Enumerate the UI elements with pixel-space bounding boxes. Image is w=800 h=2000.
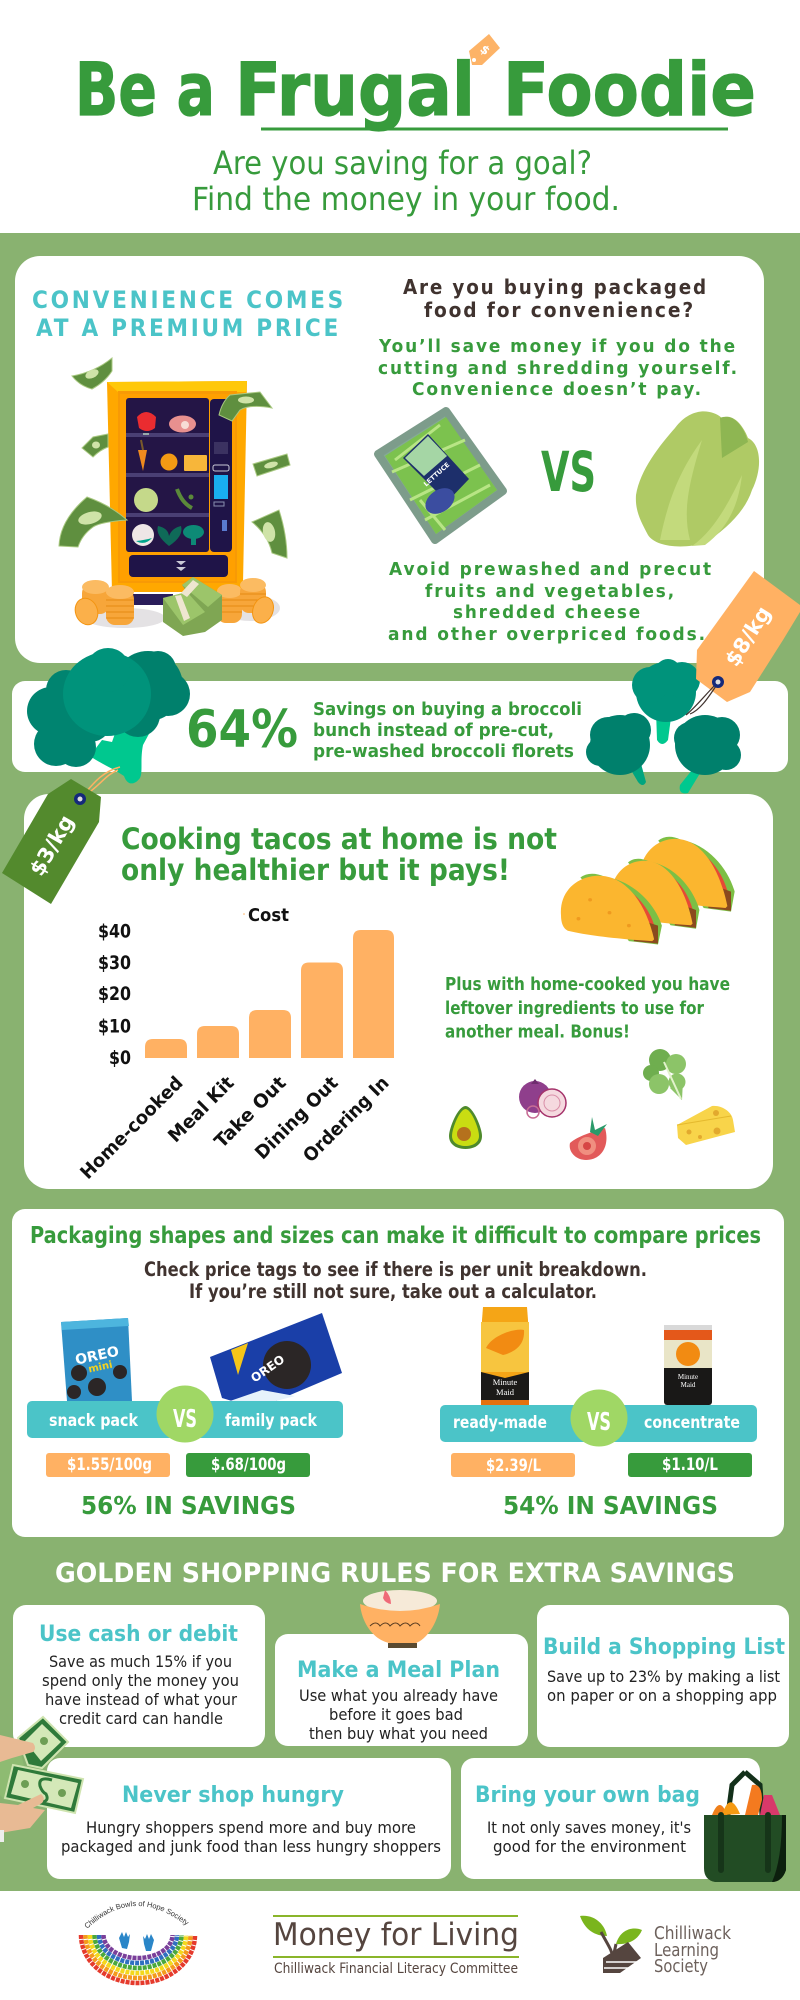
taco front [561,874,662,945]
bar chart: Cost [248,905,289,926]
text: check price tags: Check price tags to see if there is per unit breakdown. [144,1258,647,1281]
icon: price tag [469,34,500,65]
text: avoid prewashed: shredded cheese [453,602,642,623]
card: make a meal plan [275,1634,528,1746]
bar chart: $0 [109,1047,131,1069]
icon: tacos [561,837,735,945]
logo: Chilliwack Learning Society: Learning [654,1940,719,1961]
price tag: $1.10/L [628,1453,752,1477]
icon: packaged lettuce: LETTUCE [422,461,451,488]
heading: golden shopping rules: GOLDEN SHOPPING RULES FOR EXTRA SAVINGS [55,1558,735,1589]
card: make a meal plan: then buy what you need [309,1724,488,1743]
bar chart: $10 [98,1016,131,1038]
text: 54% in savings: 54% IN SAVINGS [503,1491,718,1520]
icon: bowl [360,1590,440,1648]
logo: Chilliwack Learning Society: Society [654,1956,708,1977]
logo: Chilliwack Learning Society: Chilliwack [654,1923,731,1944]
icon: avocado [449,1106,482,1149]
card: use cash or debit: credit card can handle [59,1709,223,1728]
price tag: $.68/100g [186,1453,310,1477]
icon: red onion [519,1079,566,1118]
heading: are you buying packaged food: food for convenience? [424,298,695,322]
text: leftovers bonus [445,975,730,1042]
text: check price tags: If you’re still not sure, take out a calculator. [189,1280,597,1303]
card: use cash or debit [13,1605,265,1747]
price tag: $2.39/L [451,1453,575,1477]
heading: cooking tacos: Cooking tacos at home is not [121,822,557,856]
icon: large broccoli [27,648,190,783]
card: make a meal plan: before it goes bad [329,1705,463,1724]
text: save money: cutting and shredding yourself. [378,358,739,379]
panel: tacos [24,794,773,1189]
icon: minute maid carton: Maid [496,1387,515,1397]
card: build a shopping list: on paper or on a shopping app [547,1686,777,1705]
panel: packaging [12,1209,784,1537]
text: savings on broccoli: pre-washed broccoli florets [313,742,574,762]
subtitle: Are you saving for a goal? [213,144,592,182]
card: make a meal plan: Use what you already have [299,1686,498,1705]
logo: Money for Living [273,1915,519,1977]
text: VS: VS [541,440,596,504]
icon: $8/kg tag [686,571,800,715]
icon: minute maid concentrate [664,1325,712,1405]
bar chart: Take Out [211,1073,291,1153]
card: bring your own bag: Bring your own bag [475,1783,700,1808]
comparison band: snack vs family [27,1386,343,1442]
icon: whole lettuce [636,411,759,546]
icon: three broccoli florets [586,659,741,793]
comparison band: snack vs family: VS [173,1404,197,1433]
text: 64%: 64% [186,700,298,760]
vending items [132,412,207,546]
bar chart: Home-cooked [77,1073,188,1184]
bar chart: $30 [98,952,131,974]
icon: minute maid carton: Minute [493,1377,517,1387]
card: bring your own bag [461,1758,760,1879]
icon: oreo family pack: OREO [248,1352,287,1385]
logo: Chilliwack Bowls of Hope Society: Chilliwack Bowls of Hope Society [84,1900,189,1928]
text: avoid prewashed: fruits and vegetables, [425,581,676,602]
text: avoid prewashed: Avoid prewashed and precut [389,559,713,580]
coins left [72,580,134,628]
heading: convenience comes at a premium price: AT A PREMIUM PRICE [36,314,341,342]
heading: are you buying packaged food: Are you buying packaged [403,275,708,299]
card: make a meal plan: Make a Meal Plan [297,1658,500,1683]
icon: oreo mini box [61,1318,132,1401]
price tag: $1.55/100g: $1.55/100g [67,1455,152,1474]
taco rear [640,837,735,912]
title: Be a [75,48,215,133]
price tag: $2.39/L: $2.39/L [486,1456,541,1475]
icon: oreo mini box: mini [87,1360,114,1375]
heading: cooking tacos [121,822,557,887]
title [75,48,756,133]
bar chart: Meal Kit [164,1073,239,1147]
bar chart: Ordering In [299,1073,394,1167]
icon: packaged lettuce [378,411,503,540]
panel: convenience [15,256,764,663]
logo: Money for Living: Chilliwack Financial Literacy Committee [274,1961,518,1977]
text: leftovers bonus: Plus with home-cooked you have [445,975,730,995]
bar chart: Dining Out [251,1073,343,1164]
comparison band: snack vs family: family pack [225,1411,318,1431]
icon: price tag: $ [477,42,493,58]
text: avoid prewashed: and other overpriced foods. [388,624,707,645]
icon: shopping bag [704,1772,786,1882]
comparison band: ready-made vs concentrate: VS [587,1407,611,1436]
card: bring your own bag: It not only saves money, it's [487,1818,691,1837]
icon: oreo family pack [210,1313,342,1401]
icon: oreo mini box: OREO [74,1344,121,1369]
bar chart: $20 [98,983,131,1005]
text: avoid prewashed [388,559,713,645]
subtitle: Find the money in your food. [192,180,620,218]
card: bring your own bag: good for the environment [493,1837,686,1856]
cash stack [163,577,222,636]
title: Foodie [503,48,756,133]
text: savings on broccoli: bunch instead of pre-cut, [313,721,554,741]
comparison band: ready-made vs concentrate: concentrate [644,1413,740,1433]
price tag: $1.10/L: $1.10/L [662,1455,718,1474]
bar chart [77,905,394,1184]
heading: cooking tacos: only healthier but it pays! [121,853,510,887]
coins right [217,578,277,626]
icon: hands holding money [0,1717,83,1842]
heading: are you buying packaged food [403,275,708,322]
text: check price tags [144,1258,647,1303]
card: never shop hungry: packaged and junk food than less hungry shoppers [61,1837,441,1856]
card: never shop hungry [47,1758,451,1879]
icon: minute maid concentrate: Minute [678,1373,698,1381]
comparison band: ready-made vs concentrate [440,1390,757,1446]
text: 56% in savings: 56% IN SAVINGS [81,1491,296,1520]
text: save money: You’ll save money if you do the [378,336,737,357]
icon: $8/kg tag: $8/kg [720,602,776,671]
card: use cash or debit: spend only the money you [42,1671,239,1690]
icon: lettuce leaf [643,1049,686,1100]
logo: Chilliwack Learning Society [580,1916,731,1977]
subtitle [192,144,620,218]
card: build a shopping list: Save up to 23% by making a list [547,1667,780,1686]
panel: broccoli savings [12,681,788,772]
card: use cash or debit: have instead of what your [45,1690,237,1709]
comparison band: ready-made vs concentrate: ready-made [453,1413,547,1433]
heading: convenience comes at a premium price: CONVENIENCE COMES [32,286,346,314]
title: Frugal [235,48,475,133]
heading: convenience comes at a premium price [32,286,346,342]
text: savings on broccoli [313,700,582,762]
comparison band: snack vs family: snack pack [49,1411,139,1431]
icon: minute maid carton [481,1307,529,1405]
logo: Chilliwack Bowls of Hope Society [78,1900,198,1986]
card: use cash or debit: Use cash or debit [39,1622,238,1647]
icon: minute maid concentrate: Maid [681,1381,696,1389]
text: save money: Convenience doesn’t pay. [412,379,703,400]
icon: $3/kg tag: $3/kg [25,811,79,880]
icon: vending machine with money [59,358,290,636]
logo: Money for Living: Money for Living [273,1917,519,1953]
text: leftovers bonus: another meal. Bonus! [445,1022,630,1042]
icon: tomato [570,1117,607,1160]
price tag: $1.55/100g [46,1453,170,1477]
text: savings on broccoli: Savings on buying a broccoli [313,700,582,720]
price tag: $.68/100g: $.68/100g [211,1455,286,1474]
taco middle [611,859,699,929]
text: leftovers bonus: leftover ingredients to use for [445,999,704,1019]
card: use cash or debit: Save as much 15% if you [49,1652,232,1671]
bar chart: $40 [98,920,131,942]
icon: $3/kg tag [2,767,120,904]
card: never shop hungry: Hungry shoppers spend more and buy more [86,1818,416,1837]
card: never shop hungry: Never shop hungry [122,1783,344,1808]
text: save money [378,336,739,400]
card: build a shopping list [537,1605,789,1747]
card: build a shopping list: Build a Shopping List [543,1635,785,1660]
icon: cheese [677,1106,735,1145]
